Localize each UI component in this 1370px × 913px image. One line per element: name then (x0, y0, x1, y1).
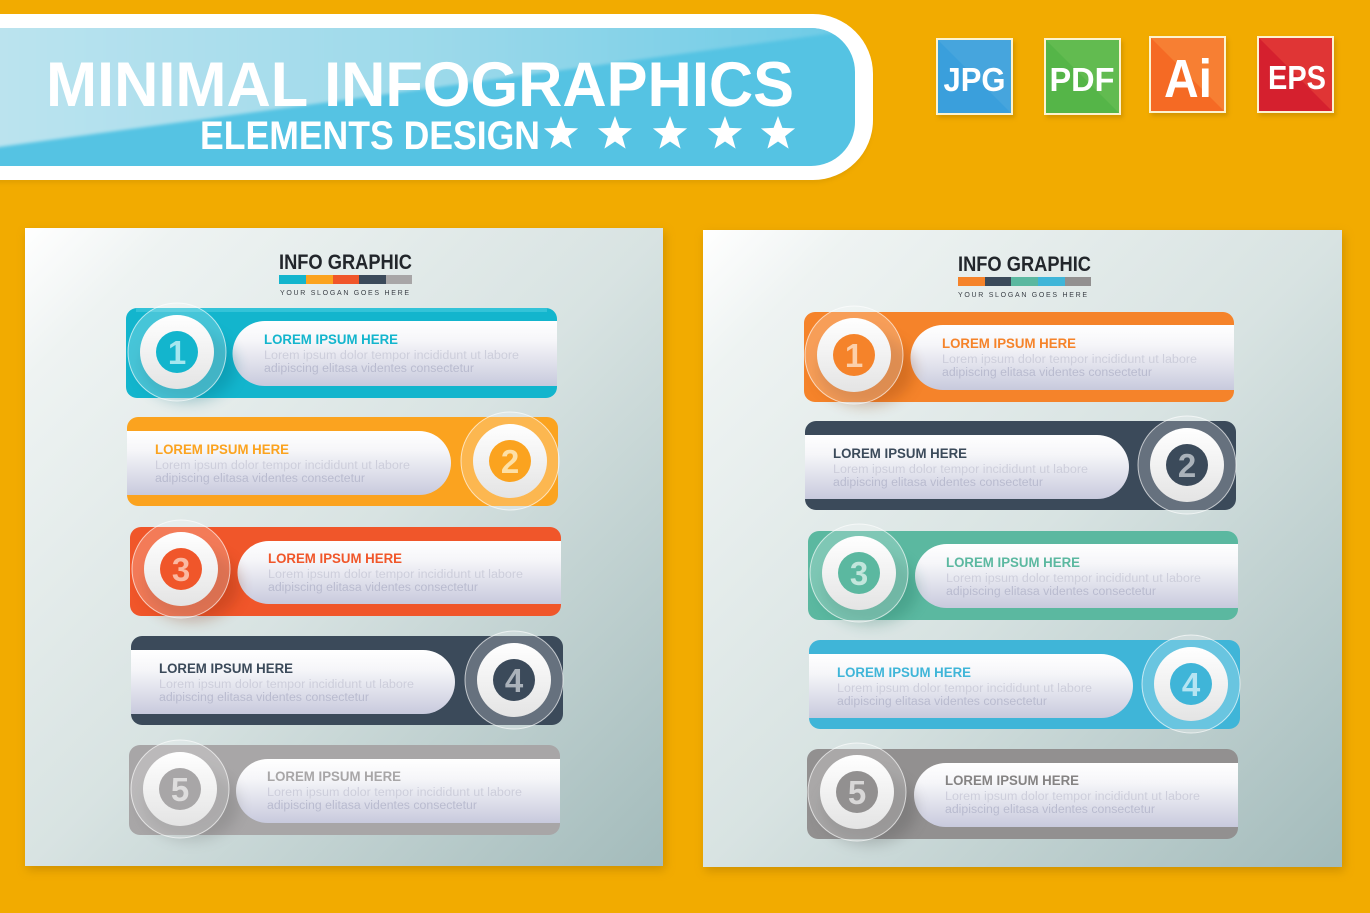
icon: Ai: Ai (1164, 49, 1212, 109)
heading: YOUR SLOGAN GOES HERE (958, 292, 1087, 299)
row 4: Lorem ipsum dolor tempor incididunt ut labore (837, 683, 1092, 695)
rating stars (544, 116, 795, 149)
row 5: adipiscing elitasa videntes consectetur (945, 804, 1155, 816)
row 2: Lorem ipsum dolor tempor incididunt ut labore (833, 464, 1088, 476)
row 1: Lorem ipsum dolor tempor incididunt ut labore (264, 350, 519, 362)
icon: JPG (936, 38, 1015, 118)
row 5 (807, 743, 1238, 845)
row 3: adipiscing elitasa videntes consectetur (946, 586, 1156, 598)
banner title: MINIMAL INFOGRAPHICS (46, 50, 794, 120)
row 2: adipiscing elitasa videntes consectetur (833, 477, 1043, 489)
row 5: Lorem ipsum dolor tempor incididunt ut labore (945, 791, 1200, 803)
row 5: 5 (171, 771, 189, 808)
icon: EPS: EPS (1268, 59, 1326, 96)
icon: Ai (1149, 36, 1228, 116)
row 4: adipiscing elitasa videntes consectetur (837, 696, 1047, 708)
row 3 (130, 520, 561, 621)
row 1: LOREM IPSUM HERE (942, 336, 1076, 351)
row 2 (805, 416, 1236, 514)
row 4 (809, 635, 1240, 733)
row 2 (127, 412, 559, 510)
row 2: 2 (501, 443, 519, 480)
row 1: Lorem ipsum dolor tempor incididunt ut labore (942, 354, 1197, 366)
row 4: Lorem ipsum dolor tempor incididunt ut labore (159, 679, 414, 691)
row 4: 4 (505, 662, 524, 699)
row 2: LOREM IPSUM HERE (155, 442, 289, 457)
row 1: adipiscing elitasa videntes consectetur (942, 367, 1152, 379)
panel: right infographic (703, 230, 1344, 871)
banner subtitle: ELEMENTS DESIGN (200, 114, 540, 158)
row 2: Lorem ipsum dolor tempor incididunt ut labore (155, 460, 410, 472)
icon: JPG: JPG (944, 61, 1006, 98)
row 2: 2 (1178, 447, 1196, 484)
heading (279, 251, 412, 297)
row 5: LOREM IPSUM HERE (267, 769, 401, 784)
row 3: Lorem ipsum dolor tempor incididunt ut labore (946, 573, 1201, 585)
heading: INFO GRAPHIC (279, 251, 412, 274)
icon: PDF (1044, 38, 1123, 118)
row 3: 3 (850, 555, 868, 592)
row 5 (129, 740, 560, 841)
heading: YOUR SLOGAN GOES HERE (280, 290, 409, 297)
row 4 (131, 631, 563, 729)
row 5: 5 (848, 774, 866, 811)
row 2: adipiscing elitasa videntes consectetur (155, 473, 365, 485)
row 1: LOREM IPSUM HERE (264, 332, 398, 347)
row 5: LOREM IPSUM HERE (945, 773, 1079, 788)
row 1: 1 (168, 334, 186, 371)
row 3: Lorem ipsum dolor tempor incididunt ut labore (268, 569, 523, 581)
banner (0, 14, 873, 183)
row 1 (804, 306, 1234, 406)
row 4: LOREM IPSUM HERE (159, 661, 293, 676)
row 2: LOREM IPSUM HERE (833, 446, 967, 461)
icon: PDF: PDF (1050, 61, 1114, 98)
row 1 (126, 303, 557, 402)
panel: left infographic (25, 228, 665, 870)
heading (958, 253, 1091, 299)
row 4: adipiscing elitasa videntes consectetur (159, 692, 369, 704)
row 1: adipiscing elitasa videntes consectetur (264, 363, 474, 375)
row 3 (808, 524, 1238, 625)
row 3: adipiscing elitasa videntes consectetur (268, 582, 478, 594)
row 5: Lorem ipsum dolor tempor incididunt ut labore (267, 787, 522, 799)
row 4: LOREM IPSUM HERE (837, 665, 971, 680)
row 4: 4 (1182, 666, 1201, 703)
row 3: LOREM IPSUM HERE (946, 555, 1080, 570)
row 5: adipiscing elitasa videntes consectetur (267, 800, 477, 812)
icon: EPS (1257, 36, 1336, 116)
row 3: 3 (172, 551, 190, 588)
row 1: 1 (845, 337, 863, 374)
heading: INFO GRAPHIC (958, 253, 1091, 276)
row 3: LOREM IPSUM HERE (268, 551, 402, 566)
